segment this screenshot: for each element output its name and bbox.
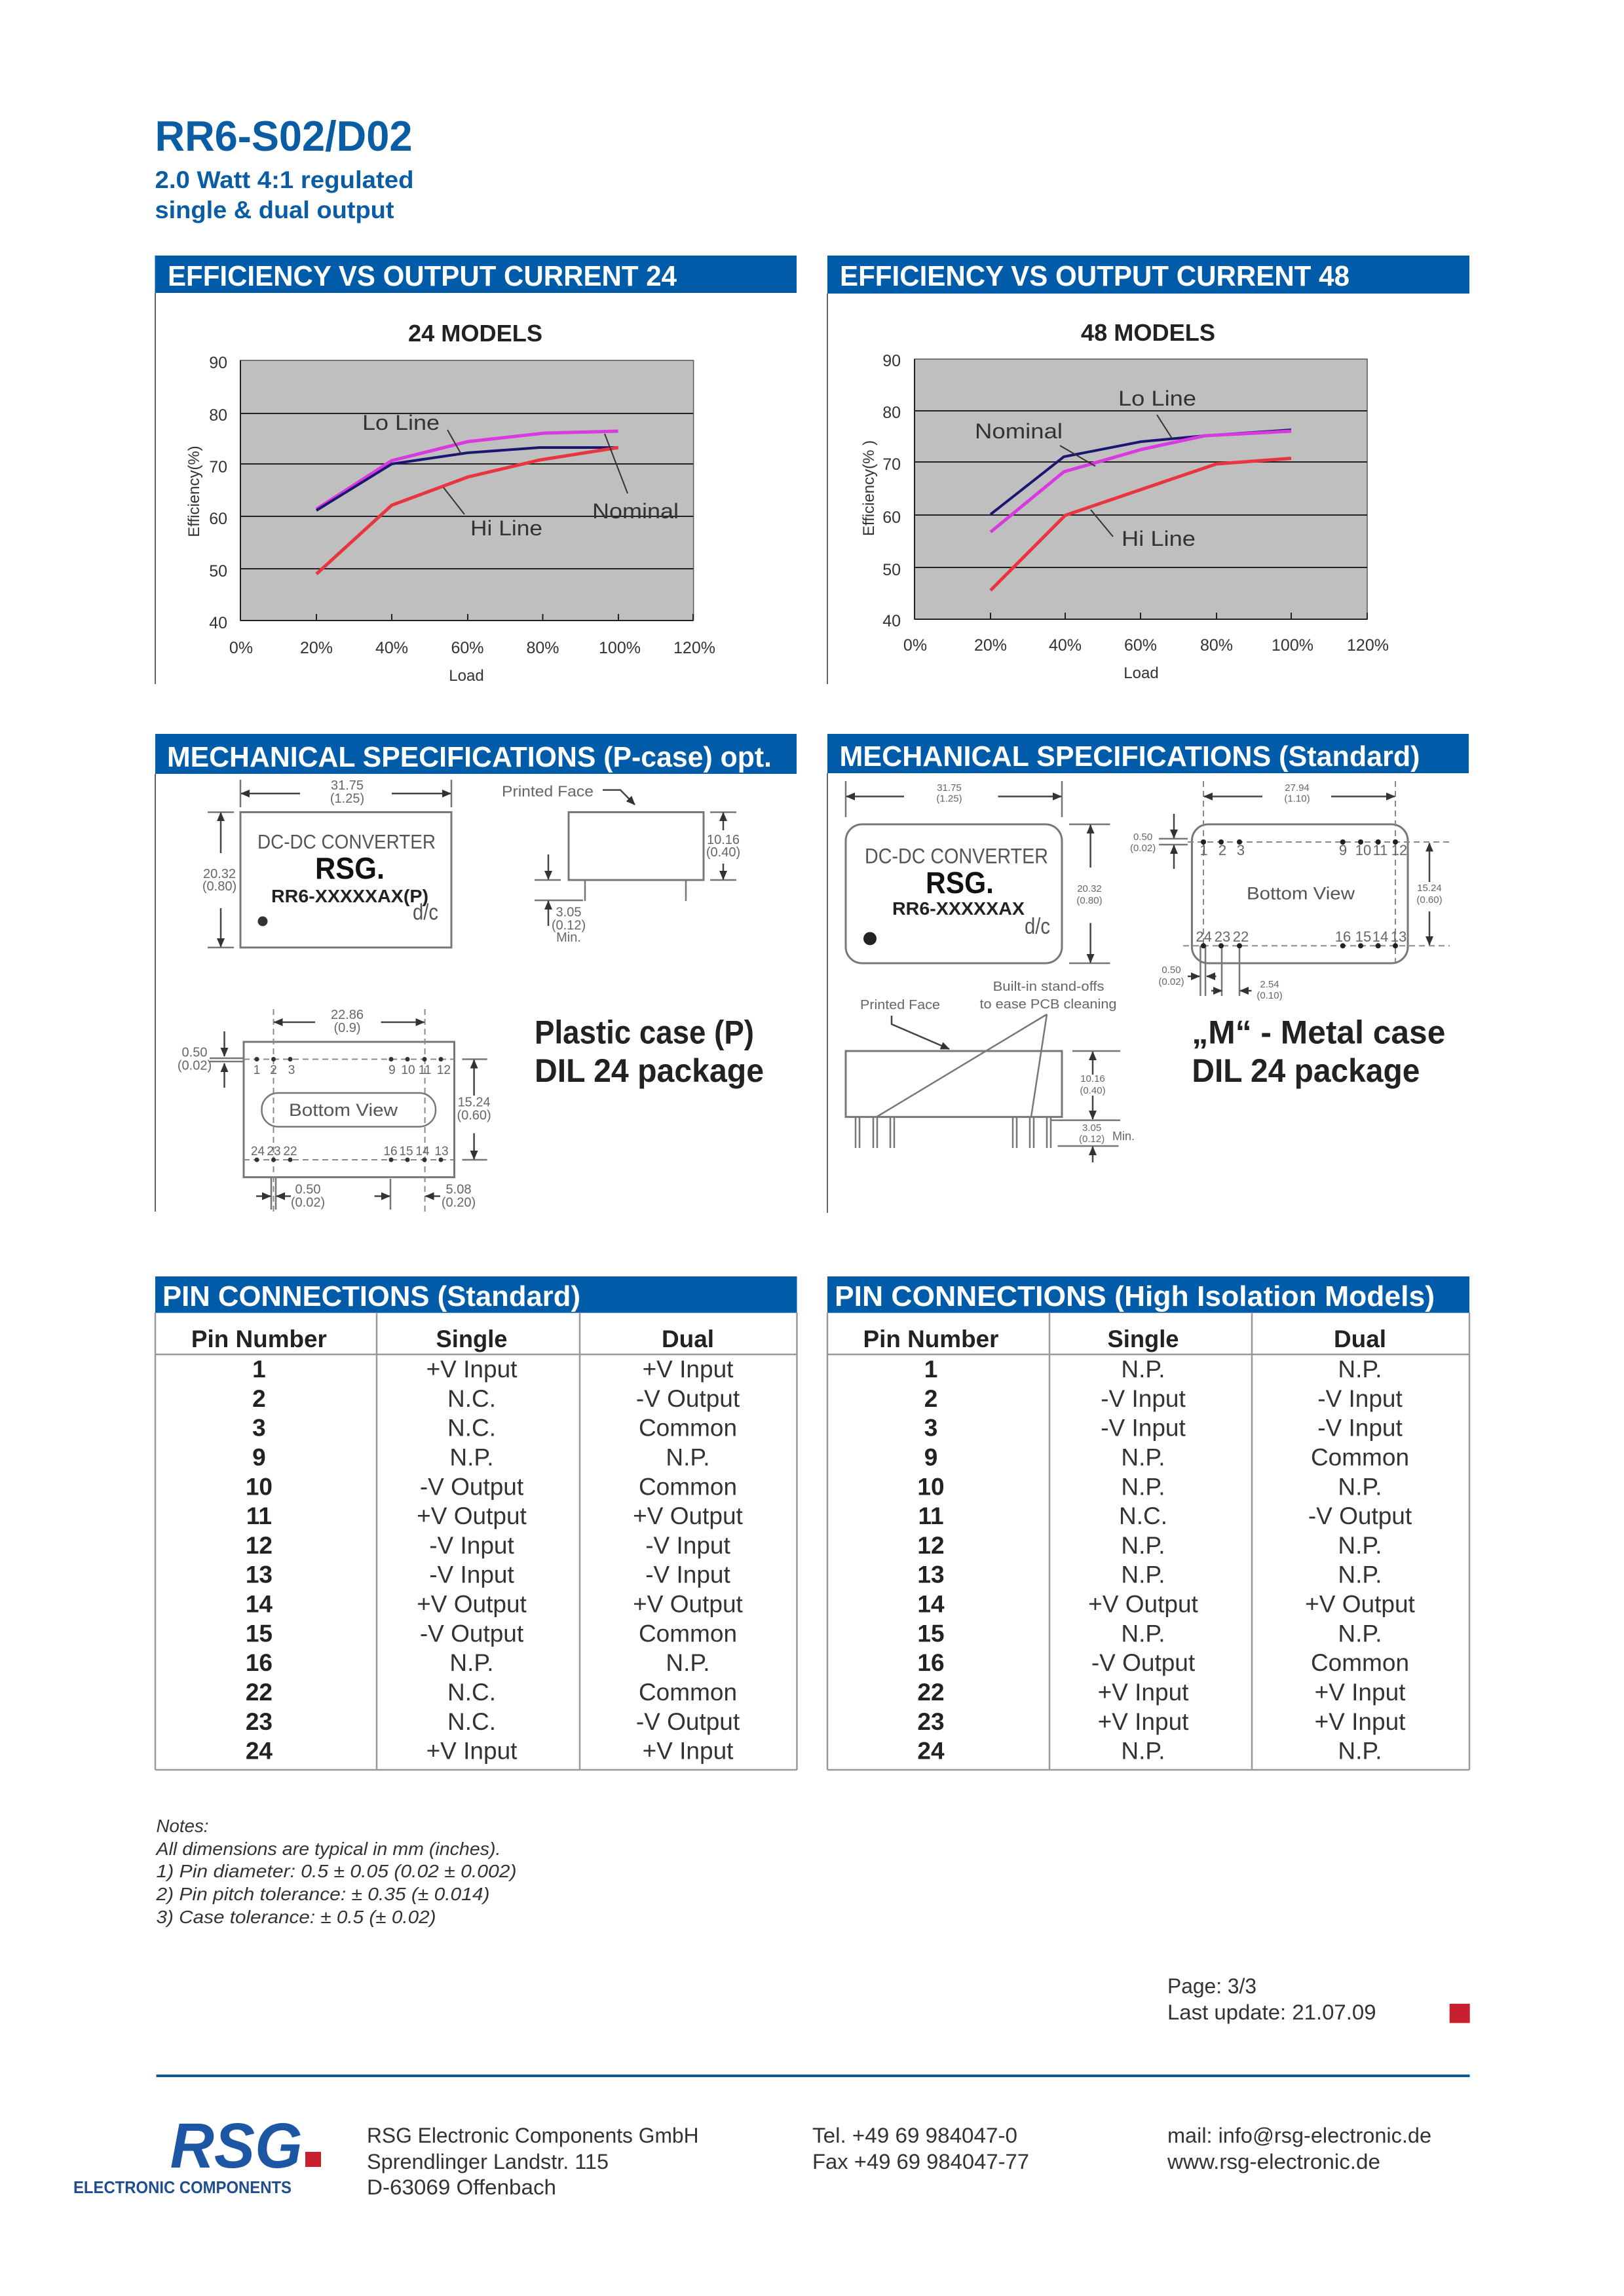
pin number column: standard: 14 [246, 1591, 273, 1617]
footer web [1167, 2124, 1431, 2173]
title: RR6-S02/D02 [155, 112, 413, 160]
line chart: 48 models: 80% [1200, 636, 1233, 655]
heading: pin connections standard [155, 1276, 797, 1313]
table header: high isolation [863, 1326, 1386, 1352]
single column: high isolation: +V Output [1088, 1591, 1199, 1617]
dual column: standard: Common [639, 1620, 737, 1647]
diagram: P-case bottom view: 13 [434, 1145, 449, 1158]
pin number column: standard: 23 [246, 1708, 273, 1735]
line chart: 24 models: 60% [451, 639, 484, 657]
diagram: P-case side view: (0.12) [552, 919, 586, 933]
diagram: metal case top view: RR6-XXXXXAX [892, 898, 1025, 919]
panel: pin connections standard [155, 1276, 797, 1770]
single column: standard: -V Output [420, 1473, 524, 1500]
diagram: metal case bottom view [1130, 781, 1450, 1001]
table header: high isolation: Single [1107, 1326, 1179, 1352]
footer web: www.rsg-electronic.de [1167, 2150, 1380, 2173]
line chart: 48 models: Load [1124, 664, 1159, 682]
pin number column: standard: 11 [246, 1502, 272, 1529]
page info: Page: 3/3 [1167, 1974, 1256, 1998]
diagram: metal case bottom view: 10 [1355, 842, 1371, 858]
single column: standard: N.C. [447, 1385, 496, 1412]
pin number column: high isolation: 2 [924, 1385, 937, 1412]
line chart: 24 models: 80% [526, 639, 559, 657]
diagram: metal case top view: DC-DC CONVERTER [865, 844, 1048, 868]
single column: standard: +V Output [417, 1591, 527, 1617]
dual column: standard: -V Output [636, 1385, 740, 1412]
diagram: P-case side view: 10.16 [707, 833, 740, 847]
pin number column: standard: 9 [252, 1444, 266, 1470]
diagram: metal case bottom view: 2 [1218, 842, 1226, 858]
dual column: standard: Common [639, 1473, 737, 1500]
diagram: metal case bottom view: 15 [1355, 928, 1371, 945]
diagram: metal case bottom view: 0.50 [1161, 965, 1181, 976]
diagram: P-case bottom view: (0.20) [442, 1195, 476, 1210]
line chart: 48 models: 50 [882, 561, 901, 579]
line chart: 48 models: 60% [1124, 636, 1157, 655]
dual column: high isolation: +V Output [1305, 1591, 1416, 1617]
line chart: 48 models: 90 [882, 352, 901, 370]
line chart: 24 models: 90 [209, 354, 227, 372]
pin number column: standard [246, 1356, 273, 1765]
diagram: metal case bottom view: (0.02) [1158, 976, 1184, 987]
single column: standard: +V Output [417, 1502, 527, 1529]
line chart: 24 models: Load [449, 667, 484, 685]
single column: high isolation: N.P. [1121, 1561, 1165, 1588]
single column: high isolation: -V Output [1091, 1649, 1196, 1676]
diagram: metal case top view: 31.75 [937, 782, 962, 794]
diagram: metal case bottom view: (0.10) [1256, 990, 1283, 1001]
diagram: metal case bottom view: 13 [1391, 928, 1407, 945]
diagram: metal case top view: (0.80) [1076, 895, 1103, 906]
line chart: 48 models: Efficiency(% ) [860, 440, 878, 536]
pin number column: standard: 13 [246, 1561, 273, 1588]
single column: high isolation: N.P. [1121, 1532, 1165, 1559]
diagram: metal case bottom view: 12 [1391, 842, 1407, 858]
line chart: 24 models: Lo Line [362, 411, 440, 434]
footer address: RSG Electronic Components GmbH [367, 2124, 698, 2147]
diagram: metal case side view: (0.40) [1080, 1085, 1106, 1096]
diagram: P-case top view: RSG. [315, 851, 385, 885]
diagram: metal case bottom view: 3 [1237, 842, 1245, 858]
diagram: P-case bottom view: 24 [251, 1145, 265, 1158]
line chart: 48 models: 120% [1347, 636, 1389, 655]
pin number column: high isolation: 24 [917, 1738, 945, 1765]
diagram: metal case side view: Built-in stand-offs [993, 980, 1105, 994]
table header: standard: Pin Number [191, 1326, 327, 1352]
diagram: metal case bottom view: 11 [1373, 842, 1388, 858]
dual column: standard: Common [639, 1415, 737, 1442]
dual column: high isolation: N.P. [1338, 1356, 1382, 1383]
line chart: 48 models: 100% [1272, 636, 1313, 655]
page info: Last update: 21.07.09 [1167, 2000, 1376, 2024]
pin number column: standard: 16 [246, 1649, 273, 1676]
diagram: metal case side view: (0.12) [1079, 1134, 1105, 1145]
single column: high isolation: N.P. [1121, 1620, 1165, 1647]
label: plastic case: Plastic case (P) [535, 1014, 754, 1051]
panel: mechanical specifications P-case [155, 734, 797, 1212]
diagram: P-case top view: 31.75 [331, 778, 364, 793]
heading: mechanical standard: MECHANICAL SPECIFICATIONS (Standard) [840, 740, 1420, 773]
single column: standard: N.P. [449, 1444, 494, 1470]
diagram: P-case top view: 20.32 [203, 867, 236, 881]
line chart: 24 models: 40% [375, 639, 408, 657]
diagram: P-case side view: Min. [556, 930, 581, 945]
line chart: 24 models: 40 [209, 614, 227, 632]
line chart: 24 models: 60 [209, 510, 227, 528]
pin number column: high isolation: 14 [917, 1591, 945, 1617]
single column: standard: -V Output [420, 1620, 524, 1647]
diagram: metal case bottom view: 24 [1196, 928, 1212, 945]
diagram: metal case bottom view: 15.24 [1417, 883, 1442, 894]
dual column: high isolation: N.P. [1338, 1620, 1382, 1647]
pin number column: standard: 2 [252, 1385, 266, 1412]
diagram: P-case bottom view: (0.9) [333, 1021, 361, 1035]
pin number column: standard: 24 [246, 1738, 273, 1765]
diagram: P-case top view: DC-DC CONVERTER [257, 830, 436, 853]
pin number column: high isolation: 23 [917, 1708, 945, 1735]
line chart: 48 models: Lo Line [1118, 387, 1196, 410]
dual column: standard: -V Input [645, 1561, 731, 1588]
footer phone: Tel. +49 69 984047-0 [812, 2124, 1017, 2147]
notes: All dimensions are typical in mm (inches). [155, 1839, 500, 1859]
diagram: metal case bottom view: 9 [1339, 842, 1347, 858]
dual column: standard: Common [639, 1679, 737, 1706]
line chart: 24 models: 0% [229, 639, 253, 657]
logo: RSG [73, 2110, 321, 2197]
table header: high isolation: Pin Number [863, 1326, 998, 1352]
line chart: 48 models: 40% [1049, 636, 1082, 655]
diagram: metal case side view: Printed Face [860, 998, 940, 1012]
diagram: P-case bottom view: 23 [267, 1145, 281, 1158]
page info [1167, 1974, 1376, 2024]
dual column: standard: N.P. [666, 1649, 710, 1676]
panel: efficiency 24 [155, 256, 797, 685]
footer address: Sprendlinger Landstr. 115 [367, 2150, 609, 2173]
notes: 2) Pin pitch tolerance: ± 0.35 (± 0.014) [155, 1884, 490, 1904]
single column: high isolation [1088, 1356, 1199, 1765]
dual column: standard: +V Input [643, 1356, 734, 1383]
pin number column: high isolation: 15 [917, 1620, 945, 1647]
heading: efficiency 24: EFFICIENCY VS OUTPUT CURRENT 24 [168, 260, 677, 292]
diagram: P-case side view: 3.05 [556, 906, 581, 920]
line chart: 24 models: 20% [300, 639, 333, 657]
diagram: P-case bottom view: 11 [419, 1063, 431, 1077]
dual column: standard: +V Output [633, 1502, 744, 1529]
single column: high isolation: -V Input [1101, 1385, 1186, 1412]
line chart: 24 models: Nominal [592, 499, 679, 523]
single column: standard: N.C. [447, 1708, 496, 1735]
diagram: metal case bottom view: 27.94 [1285, 782, 1310, 794]
pin number column: high isolation [917, 1356, 945, 1765]
diagram: metal case top view: (1.25) [936, 793, 962, 805]
dual column: high isolation: -V Input [1317, 1385, 1403, 1412]
heading: pin connections standard: PIN CONNECTIONS (Standard) [162, 1280, 580, 1312]
dual column: high isolation [1305, 1356, 1416, 1765]
panel: mechanical specifications standard [827, 734, 1469, 1213]
diagram: P-case bottom view: 15.24 [458, 1096, 491, 1110]
diagram: P-case bottom view: 15 [399, 1145, 413, 1158]
line chart: 48 models: 40 [882, 612, 901, 630]
diagram: P-case bottom view: 1 [254, 1063, 260, 1077]
single column: standard: -V Input [429, 1561, 515, 1588]
diagram: metal case bottom view: 16 [1335, 928, 1351, 945]
dual column: high isolation: N.P. [1338, 1532, 1382, 1559]
pin number column: high isolation: 12 [917, 1532, 945, 1559]
diagram: metal case bottom view: (1.10) [1284, 793, 1310, 805]
panel: pin connections high isolation [827, 1276, 1469, 1770]
diagram: P-case bottom view: 12 [437, 1063, 451, 1077]
diagram: P-case side view: (0.40) [706, 845, 740, 860]
line chart: 48 models: Hi Line [1122, 527, 1196, 550]
single column: high isolation: -V Input [1101, 1415, 1186, 1442]
table header: high isolation: Dual [1334, 1326, 1386, 1352]
dual column: high isolation: Common [1311, 1444, 1409, 1470]
pin number column: standard: 12 [246, 1532, 273, 1559]
label: plastic case [535, 1014, 764, 1089]
single column: standard: N.P. [449, 1649, 494, 1676]
diagram: metal case top view: d/c [1025, 914, 1050, 939]
line chart: 24 models: 100% [599, 639, 641, 657]
dual column: high isolation: +V Input [1315, 1708, 1406, 1735]
diagram: P-case bottom view: 0.50 [182, 1046, 207, 1060]
table header: standard: Dual [662, 1326, 714, 1352]
heading: pin connections high isolation: PIN CONNECTIONS (High Isolation Models) [835, 1280, 1435, 1312]
diagram: P-case bottom view: 14 [415, 1145, 430, 1158]
footer web: mail: info@rsg-electronic.de [1167, 2124, 1431, 2147]
diagram: metal case bottom view: (0.60) [1416, 894, 1443, 906]
icon: red square [1450, 2004, 1470, 2023]
dual column: standard: -V Output [636, 1708, 740, 1735]
single column: high isolation: +V Input [1098, 1679, 1189, 1706]
dual column: high isolation: Common [1311, 1649, 1409, 1676]
chart title: 48 models: 48 MODELS [1081, 319, 1215, 346]
label: plastic case: DIL 24 package [535, 1052, 764, 1089]
notes: 1) Pin diameter: 0.5 ± 0.05 (0.02 ± 0.002) [156, 1861, 516, 1881]
dual column: standard: +V Output [633, 1591, 744, 1617]
single column: standard: -V Input [429, 1532, 515, 1559]
diagram: metal case side view: 3.05 [1082, 1122, 1101, 1134]
pin number column: standard: 3 [252, 1415, 266, 1442]
pin number column: high isolation: 1 [924, 1356, 937, 1383]
single column: high isolation: N.P. [1121, 1738, 1165, 1765]
single column: standard [417, 1356, 527, 1765]
pin number column: high isolation: 22 [917, 1679, 945, 1706]
panel: efficiency 48 [827, 256, 1469, 684]
diagram: P-case top view [202, 778, 451, 947]
diagram: P-case bottom view: 5.08 [446, 1182, 471, 1196]
diagram: metal case bottom view: (0.02) [1130, 843, 1156, 854]
line chart: 24 models: 80 [209, 406, 227, 425]
pin number column: standard: 22 [246, 1679, 273, 1706]
pin number column: high isolation: 13 [917, 1561, 945, 1588]
dual column: standard: N.P. [666, 1444, 710, 1470]
label: metal case: DIL 24 package [1192, 1052, 1420, 1089]
line chart: 48 models: 20% [974, 636, 1007, 655]
pin number column: standard: 15 [246, 1620, 273, 1647]
diagram: P-case bottom view: (0.60) [457, 1109, 491, 1123]
single column: standard: N.C. [447, 1415, 496, 1442]
dual column: standard: +V Input [643, 1738, 734, 1765]
pin number column: high isolation: 9 [924, 1444, 937, 1470]
diagram: metal case side view: 10.16 [1080, 1073, 1105, 1084]
diagram: metal case bottom view: 14 [1372, 928, 1388, 945]
line chart: 24 models: 120% [673, 639, 715, 657]
diagram: metal case bottom view: 22 [1233, 928, 1249, 945]
diagram: metal case side view [846, 980, 1135, 1162]
dual column: high isolation: N.P. [1338, 1561, 1382, 1588]
heading: mechanical P-case: MECHANICAL SPECIFICATIONS (P-case) opt. [167, 741, 772, 773]
diagram: P-case bottom view: 2 [270, 1063, 277, 1077]
chart title: 24 models: 24 MODELS [408, 320, 542, 347]
dual column: high isolation: N.P. [1338, 1473, 1382, 1500]
single column: standard: N.C. [447, 1679, 496, 1706]
line chart: 48 models: 80 [882, 404, 901, 422]
diagram: metal case side view: to ease PCB cleaning [980, 997, 1116, 1012]
pin number column: high isolation: 3 [924, 1415, 937, 1442]
pin number column: standard: 10 [246, 1473, 273, 1500]
subtitle: single & dual output [155, 197, 394, 223]
diagram: P-case top view: RR6-XXXXXAX(P) [271, 886, 428, 906]
dual column: high isolation: -V Input [1317, 1415, 1403, 1442]
dual column: high isolation: +V Input [1315, 1679, 1406, 1706]
single column: high isolation: +V Input [1098, 1708, 1189, 1735]
subtitle: 2.0 Watt 4:1 regulated [155, 166, 414, 193]
heading: efficiency 48: EFFICIENCY VS OUTPUT CURRENT 48 [840, 260, 1350, 292]
diagram: P-case side view: Printed Face [502, 782, 594, 799]
dual column: standard [633, 1356, 744, 1765]
diagram: P-case bottom view: (0.02) [178, 1059, 212, 1073]
footer phone [812, 2124, 1029, 2173]
line chart: 48 models: 70 [882, 455, 901, 474]
footer address [367, 2124, 698, 2199]
pin number column: standard: 1 [252, 1356, 266, 1383]
single column: high isolation: N.P. [1121, 1444, 1165, 1470]
diagram: P-case bottom view: 0.50 [295, 1182, 320, 1196]
footer address: D-63069 Offenbach [367, 2175, 556, 2199]
dual column: high isolation: N.P. [1338, 1738, 1382, 1765]
subtitle [155, 166, 414, 223]
diagram: P-case bottom view [178, 1008, 491, 1212]
diagram: P-case bottom view: 16 [383, 1145, 398, 1158]
line chart: 24 models: Hi Line [470, 516, 542, 540]
diagram: P-case top view: (0.80) [202, 879, 236, 894]
line chart: 24 models: Efficiency(%) [185, 446, 203, 537]
line chart: 24 models [185, 354, 715, 685]
label: metal case: „M“ - Metal case [1192, 1014, 1445, 1051]
pin number column: high isolation: 16 [917, 1649, 945, 1676]
notes [155, 1816, 517, 1927]
dual column: high isolation: -V Output [1308, 1502, 1412, 1529]
notes: Notes: [156, 1816, 208, 1836]
line chart: 48 models: 0% [903, 636, 927, 655]
line chart: 24 models: 70 [209, 458, 227, 476]
logo: RSG: ELECTRONIC COMPONENTS [73, 2177, 292, 2197]
diagram: P-case side view [502, 782, 740, 945]
notes: 3) Case tolerance: ± 0.5 (± 0.02) [156, 1907, 436, 1927]
line chart: 48 models: Nominal [975, 419, 1063, 443]
diagram: metal case bottom view: 23 [1215, 928, 1230, 945]
diagram: metal case top view: RSG. [926, 866, 994, 900]
label: metal case [1192, 1014, 1445, 1089]
line chart: 48 models [860, 352, 1389, 682]
diagram: P-case bottom view: 22 [283, 1145, 297, 1158]
diagram: metal case bottom view: 0.50 [1133, 832, 1152, 843]
single column: high isolation: N.P. [1121, 1356, 1165, 1383]
pin number column: high isolation: 11 [918, 1502, 944, 1529]
diagram: P-case top view: (1.25) [330, 792, 364, 806]
single column: high isolation: N.C. [1119, 1502, 1167, 1529]
single column: standard: +V Input [426, 1738, 518, 1765]
diagram: metal case bottom view: 2.54 [1260, 979, 1279, 990]
diagram: metal case top view [846, 781, 1110, 963]
diagram: P-case top view: d/c [413, 900, 438, 925]
dual column: standard: -V Input [645, 1532, 731, 1559]
diagram: P-case bottom view: 9 [388, 1063, 396, 1077]
diagram: metal case side view: Min. [1112, 1130, 1135, 1143]
single column: high isolation: N.P. [1121, 1473, 1165, 1500]
single column: standard: +V Input [426, 1356, 518, 1383]
table header: standard [191, 1326, 714, 1352]
diagram: P-case bottom view: Bottom View [289, 1100, 398, 1120]
diagram: metal case top view: 20.32 [1077, 883, 1102, 894]
diagram: P-case bottom view: 10 [401, 1063, 415, 1077]
logo: RSG: RSG [170, 2110, 303, 2181]
diagram: P-case bottom view: 3 [288, 1063, 295, 1077]
diagram: P-case bottom view: 22.86 [331, 1008, 364, 1022]
pin number column: high isolation: 10 [917, 1473, 945, 1500]
table header: standard: Single [436, 1326, 507, 1352]
diagram: metal case bottom view: Bottom View [1247, 884, 1355, 904]
line chart: 48 models: 60 [882, 508, 901, 527]
diagram: metal case bottom view: 1 [1199, 842, 1208, 858]
footer phone: Fax +49 69 984047-77 [812, 2150, 1029, 2173]
diagram: P-case bottom view: (0.02) [291, 1195, 325, 1210]
line chart: 24 models: 50 [209, 562, 227, 581]
